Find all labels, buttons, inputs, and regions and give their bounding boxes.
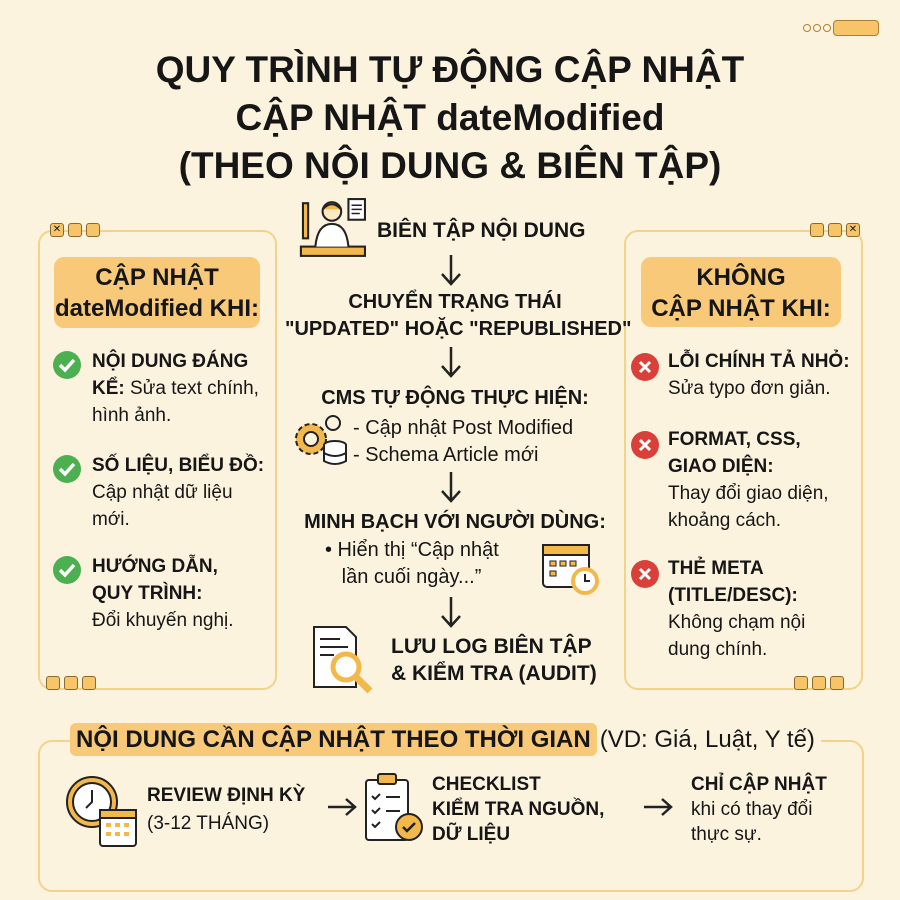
heading: left panel: dateModified KHI: xyxy=(55,295,259,322)
heading: right panel: CẬP NHẬT KHI: xyxy=(651,295,831,322)
icon: calendar clock xyxy=(542,544,599,595)
step: cms: - Cập nhật Post Modified xyxy=(353,417,573,439)
step: luu log: LƯU LOG BIÊN TẬP xyxy=(391,635,592,658)
step: checklist: KIỂM TRA NGUỒN, xyxy=(432,799,604,820)
step: minh bach: • Hiển thị “Cập nhật xyxy=(325,539,499,561)
icon: clock calendar xyxy=(66,776,137,847)
step: chuyen trang thai xyxy=(285,290,631,340)
item: format css: FORMAT, CSS, xyxy=(668,429,801,450)
item: the meta: Không chạm nội xyxy=(668,612,805,633)
item: noi dung dang ke: hình ảnh. xyxy=(92,405,171,426)
item: the meta: (TITLE/DESC): xyxy=(668,585,798,606)
text: ✕ xyxy=(53,224,61,235)
item: the meta: dung chính. xyxy=(668,639,767,660)
step: luu log xyxy=(391,634,597,685)
step: luu log: & KIỂM TRA (AUDIT) xyxy=(391,662,597,685)
title xyxy=(156,48,744,186)
step: review: REVIEW ĐỊNH KỲ xyxy=(147,785,305,806)
icon: clipboard check xyxy=(365,773,423,841)
item: format css: khoảng cách. xyxy=(668,510,781,531)
item: format css: Thay đổi giao diện, xyxy=(668,483,829,504)
step: checklist: DỮ LIỆU xyxy=(432,824,510,845)
item: loi chinh ta: LỖI CHÍNH TẢ NHỎ: xyxy=(668,351,850,372)
step: checklist: CHECKLIST xyxy=(432,774,541,795)
arrow xyxy=(441,472,461,503)
step: chi cap nhat: khi có thay đổi xyxy=(691,799,812,820)
item: the meta xyxy=(631,556,805,660)
item: so lieu xyxy=(53,454,264,530)
item: huong dan: HƯỚNG DẪN, xyxy=(92,556,218,577)
decorative squares bottom left xyxy=(46,676,96,690)
item: so lieu: mới. xyxy=(92,509,130,530)
item: noi dung dang ke: KỂ: Sửa text chính, xyxy=(92,378,259,399)
item: noi dung dang ke xyxy=(53,349,259,426)
arrow xyxy=(644,798,673,816)
icon: document magnifier xyxy=(313,626,372,694)
item: format css: GIAO DIỆN: xyxy=(668,456,774,477)
step: chi cap nhat: thực sự. xyxy=(691,824,762,845)
item: loi chinh ta: Sửa typo đơn giản. xyxy=(668,378,831,399)
title: CẬP NHẬT dateModified xyxy=(236,97,664,138)
arrow xyxy=(441,347,461,378)
panel: bottom timeline xyxy=(38,740,864,892)
center flow xyxy=(285,198,631,694)
top-right window dots xyxy=(803,20,879,36)
heading: right panel: KHÔNG xyxy=(696,264,786,291)
heading: left panel: CẬP NHẬT xyxy=(95,264,219,291)
decorative squares bottom right xyxy=(794,676,844,690)
step: cms: - Schema Article mới xyxy=(353,444,538,466)
item: noi dung dang ke: NỘI DUNG ĐÁNG xyxy=(92,351,248,372)
step: cms xyxy=(295,386,589,466)
heading: right panel xyxy=(641,257,841,327)
item: loi chinh ta xyxy=(631,349,850,399)
step: bien tap: BIÊN TẬP NỘI DUNG xyxy=(377,219,585,242)
step: checklist xyxy=(365,773,604,845)
icon: gears and database xyxy=(295,415,347,465)
arrow xyxy=(441,255,461,286)
item: the meta: THẺ META xyxy=(668,558,764,579)
step: minh bach: lần cuối ngày...” xyxy=(342,566,481,588)
item: so lieu: SỐ LIỆU, BIỂU ĐỒ: xyxy=(92,455,264,476)
item: huong dan: QUY TRÌNH: xyxy=(92,583,202,604)
title: QUY TRÌNH TỰ ĐỘNG CẬP NHẬT xyxy=(156,49,744,90)
heading: left panel xyxy=(54,257,260,328)
item: huong dan xyxy=(53,554,234,631)
step: chuyen trang thai: "UPDATED" HOẶC "REPUBLISHED" xyxy=(285,318,631,340)
step: cms: CMS TỰ ĐỘNG THỰC HIỆN: xyxy=(321,387,589,409)
arrow xyxy=(441,597,461,628)
heading: bottom: NỘI DUNG CẦN CẬP NHẬT THEO THỜI GIAN (VD: Giá, Luật, Y tế) xyxy=(76,726,815,753)
text: ✕ xyxy=(849,224,857,235)
item: so lieu: Cập nhật dữ liệu xyxy=(92,482,233,503)
step: review xyxy=(66,776,305,847)
panel: left (update when) xyxy=(38,230,277,690)
step: chi cap nhat: CHỈ CẬP NHẬT xyxy=(691,774,827,795)
step: minh bach: MINH BẠCH VỚI NGƯỜI DÙNG: xyxy=(304,511,606,533)
step: minh bach xyxy=(304,510,606,595)
step: chi cap nhat xyxy=(691,772,827,845)
icon: editor at desk xyxy=(300,198,366,257)
panel: right (don't update) xyxy=(624,230,863,690)
step: chuyen trang thai: CHUYỂN TRẠNG THÁI xyxy=(348,291,562,313)
arrow xyxy=(328,798,357,816)
step: review: (3-12 THÁNG) xyxy=(147,813,269,834)
title: (THEO NỘI DUNG & BIÊN TẬP) xyxy=(179,145,721,186)
item: huong dan: Đổi khuyến nghị. xyxy=(92,610,234,631)
item: format css xyxy=(631,429,829,531)
